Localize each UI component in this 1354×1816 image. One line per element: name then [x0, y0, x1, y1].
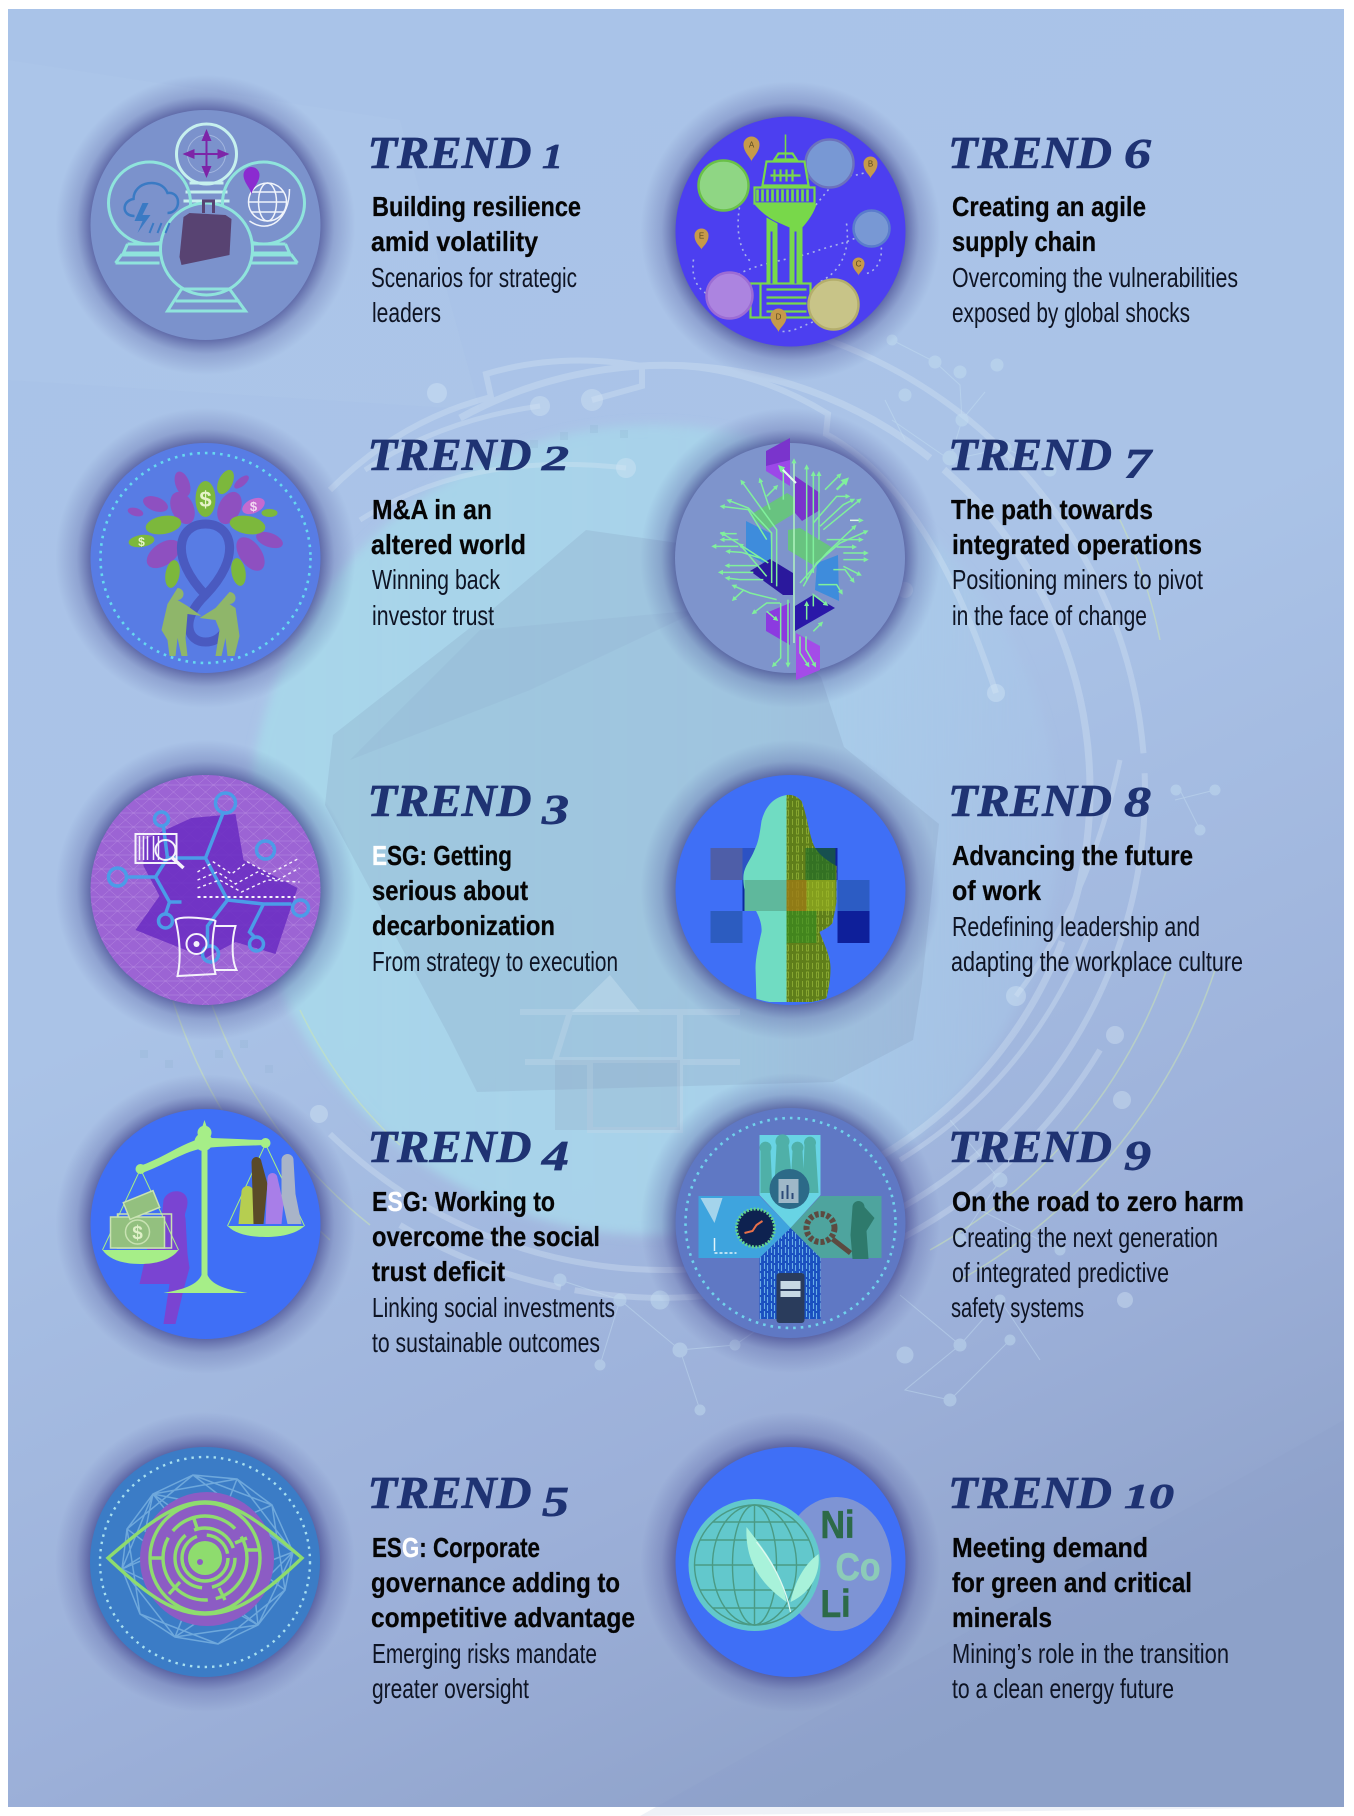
- heading: trend 5: [368, 1468, 569, 1526]
- icon: circuit tree and helix: [640, 408, 940, 708]
- subtitle: trend 8: [951, 911, 1243, 977]
- icon: control tower supply chain: E: [699, 232, 704, 240]
- heading: trend 10: [948, 1468, 1174, 1518]
- title: trend 5: [371, 1532, 635, 1633]
- heading: trend 5: TREND: [368, 1468, 532, 1518]
- heading: trend 7: 7: [1124, 442, 1154, 488]
- heading: trend 9: [948, 1122, 1151, 1180]
- title: trend 10: minerals: [952, 1602, 1052, 1633]
- panel: trend 9: [640, 1073, 1244, 1373]
- subtitle: trend 7: Positioning miners to pivot: [952, 564, 1203, 595]
- heading: trend 10: TREND: [948, 1468, 1112, 1518]
- title: trend 1: Building resilience: [372, 191, 581, 222]
- subtitle: trend 5: [372, 1638, 597, 1704]
- icon: balance scale: $: [132, 1223, 143, 1244]
- title: trend 10: Meeting demand: [952, 1532, 1148, 1563]
- panel: trend 1: [56, 75, 581, 375]
- icon: globe and critical minerals: [640, 1412, 940, 1712]
- title: trend 6: Creating an agile: [952, 191, 1146, 222]
- subtitle: trend 2: investor trust: [372, 600, 494, 631]
- subtitle: trend 2: [372, 564, 500, 631]
- panel: trend 4: [56, 1074, 615, 1374]
- heading: trend 4: TREND: [368, 1122, 532, 1172]
- subtitle: trend 10: to a clean energy future: [952, 1673, 1174, 1704]
- title: trend 3: decarbonization: [372, 910, 555, 941]
- subtitle: trend 1: Scenarios for strategic: [371, 262, 577, 293]
- heading: trend 1: 1: [542, 137, 563, 176]
- icon: maze eye: [55, 1412, 355, 1712]
- title: trend 10: [952, 1532, 1192, 1633]
- subtitle: trend 7: in the face of change: [952, 600, 1147, 631]
- icon: control tower supply chain: C: [856, 260, 862, 268]
- heading: trend 9: TREND: [948, 1122, 1112, 1172]
- title: trend 4: ESG: Working to: [372, 1186, 555, 1217]
- heading: trend 4: [368, 1122, 569, 1180]
- icon: globe and critical minerals: Ni: [820, 1504, 854, 1547]
- subtitle: trend 4: [372, 1292, 615, 1358]
- icon: control tower supply chain: A: [749, 140, 755, 150]
- icon: control tower supply chain: B: [868, 160, 873, 168]
- subtitle: trend 7: [952, 564, 1203, 631]
- title: trend 5: ESG: Corporate: [372, 1532, 540, 1563]
- icon: decarbonization network: [56, 740, 356, 1040]
- title: trend 4: overcome the social: [372, 1221, 600, 1252]
- icon: money tree and handshake: $: [138, 535, 145, 549]
- heading: trend 4: 4: [541, 1134, 569, 1180]
- title: trend 7: The path towards: [951, 494, 1153, 525]
- icon: silhouette with binary code: [640, 740, 940, 1040]
- title: trend 2: altered world: [371, 529, 526, 560]
- heading: trend 8: 8: [1124, 780, 1151, 826]
- subtitle: trend 3: From strategy to execution: [372, 946, 618, 977]
- heading: trend 2: 2: [540, 439, 569, 478]
- title: trend 2: [371, 494, 526, 560]
- subtitle: trend 5: greater oversight: [372, 1673, 529, 1704]
- title: trend 10: for green and critical: [952, 1567, 1192, 1598]
- heading: trend 5: 5: [542, 1480, 569, 1526]
- panel: trend 2: [56, 408, 569, 708]
- subtitle: trend 4: Linking social investments: [372, 1292, 615, 1323]
- subtitle: trend 10: Mining’s role in the transition: [952, 1638, 1229, 1669]
- icon: safety cross panels: [640, 1073, 940, 1373]
- heading: trend 9: 9: [1124, 1134, 1151, 1180]
- icon: control tower supply chain: [640, 82, 940, 382]
- title: trend 3: [372, 840, 555, 941]
- heading: trend 3: 3: [541, 788, 569, 834]
- subtitle: trend 1: leaders: [372, 297, 441, 328]
- title: trend 3: ESG: Getting: [372, 840, 512, 871]
- title: trend 1: [371, 191, 581, 257]
- title: trend 9: On the road to zero harm: [952, 1186, 1244, 1217]
- title: trend 8: Advancing the future: [952, 840, 1193, 871]
- subtitle: trend 6: [952, 262, 1238, 328]
- title: trend 7: integrated operations: [952, 529, 1202, 560]
- title: trend 4: trust deficit: [372, 1256, 505, 1287]
- icon: balance scale: [56, 1074, 356, 1374]
- heading: trend 10: 10: [1124, 1477, 1174, 1516]
- title: trend 7: [951, 494, 1202, 560]
- icon: money tree and handshake: [56, 408, 356, 708]
- icon: crystal balls: [56, 75, 356, 375]
- subtitle: trend 2: Winning back: [372, 564, 500, 595]
- heading: trend 7: [948, 430, 1154, 488]
- heading: trend 8: TREND: [948, 776, 1112, 826]
- icon: money tree and handshake: $: [250, 499, 258, 514]
- icon: globe and critical minerals: Co: [836, 1546, 880, 1589]
- subtitle: trend 8: Redefining leadership and: [952, 911, 1200, 942]
- subtitle: trend 9: safety systems: [951, 1292, 1084, 1323]
- subtitle: trend 9: [951, 1222, 1218, 1323]
- panel: trend 3: [56, 740, 618, 1040]
- title: trend 4: [372, 1186, 600, 1287]
- heading: trend 6: 6: [1124, 132, 1151, 178]
- subtitle: trend 6: Overcoming the vulnerabilities: [952, 262, 1238, 293]
- title: trend 6: [952, 191, 1146, 257]
- title: trend 5: governance adding to: [371, 1567, 620, 1598]
- subtitle: trend 4: to sustainable outcomes: [372, 1327, 600, 1358]
- subtitle: trend 5: Emerging risks mandate: [372, 1638, 597, 1669]
- panel: trend 8: [640, 740, 1243, 1040]
- heading: trend 6: TREND: [948, 128, 1112, 178]
- title: trend 8: [952, 840, 1193, 906]
- subtitle: trend 9: of integrated predictive: [952, 1257, 1169, 1288]
- heading: trend 3: [368, 776, 569, 834]
- panel: trend 10: [640, 1412, 1229, 1712]
- subtitle: trend 6: exposed by global shocks: [952, 297, 1190, 328]
- heading: trend 3: TREND: [368, 776, 532, 826]
- title: trend 2: M&A in an: [372, 494, 492, 525]
- title: trend 8: of work: [952, 875, 1041, 906]
- icon: control tower supply chain: D: [776, 312, 782, 322]
- panel: trend 5: [55, 1412, 635, 1712]
- icon: money tree and handshake: $: [199, 487, 212, 512]
- title: trend 5: competitive advantage: [371, 1602, 635, 1633]
- title: trend 3: serious about: [372, 875, 528, 906]
- subtitle: trend 10: [952, 1638, 1229, 1704]
- panel: trend 7: [640, 408, 1203, 708]
- subtitle: trend 1: [371, 262, 577, 328]
- title: trend 6: supply chain: [952, 226, 1096, 257]
- heading: trend 2: TREND: [368, 430, 532, 480]
- subtitle: trend 9: Creating the next generation: [952, 1222, 1218, 1253]
- title: trend 1: amid volatility: [371, 226, 538, 257]
- panel: trend 6: [640, 82, 1238, 382]
- subtitle: trend 8: adapting the workplace culture: [951, 946, 1243, 977]
- heading: trend 7: TREND: [948, 430, 1112, 480]
- heading: trend 1: TREND: [368, 128, 532, 178]
- icon: globe and critical minerals: Li: [820, 1583, 850, 1626]
